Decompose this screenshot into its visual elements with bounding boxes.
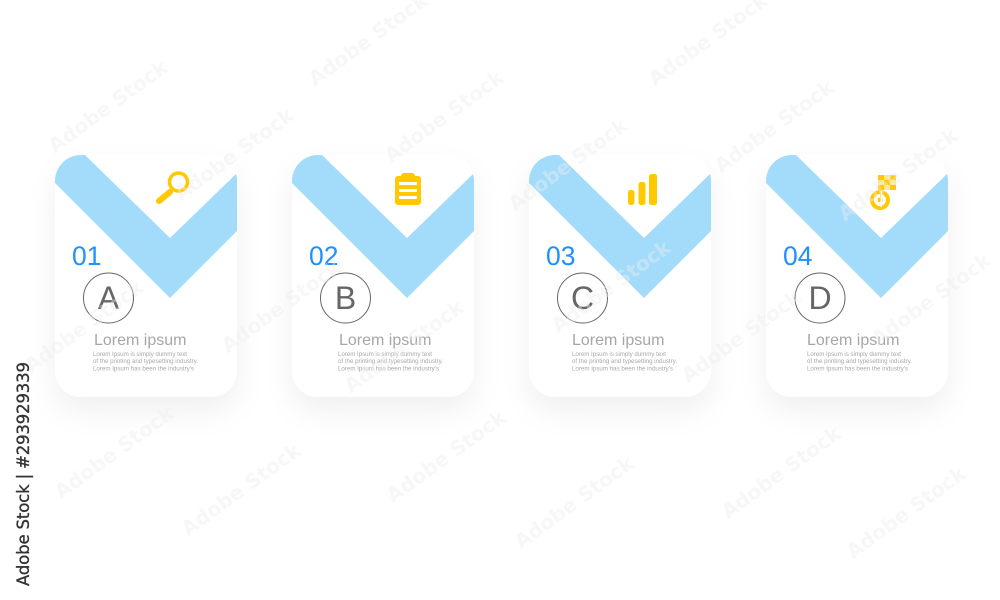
description: Lorem Ipsum is simply dummy text (338, 351, 432, 358)
step number: 02 (309, 241, 338, 271)
description: Lorem Ipsum has been the industry's (93, 366, 194, 372)
icon: bar chart (628, 174, 657, 205)
chevron band (55, 155, 237, 298)
panel: card A (55, 155, 237, 397)
heading: Lorem ipsum (572, 332, 664, 349)
panel: card D (766, 155, 948, 397)
description: Lorem Ipsum is simply dummy text (93, 351, 187, 358)
letter badge (84, 273, 134, 323)
heading: Lorem ipsum (807, 332, 899, 349)
heading: Lorem ipsum (339, 332, 431, 349)
chevron band (766, 155, 948, 298)
watermark text: Adobe Stock (380, 65, 509, 168)
watermark text: Adobe Stock (510, 451, 639, 554)
watermark text: Adobe Stock (170, 103, 299, 206)
description: Lorem Ipsum has been the industry's (572, 366, 673, 372)
step number: 01 (72, 241, 101, 271)
description (572, 351, 677, 372)
watermark text: Adobe Stock (710, 75, 839, 178)
watermark text: Adobe Stock (867, 248, 996, 351)
description: Lorem Ipsum is simply dummy text (807, 351, 901, 358)
watermark text: Adobe Stock (177, 438, 306, 541)
letter badge (320, 273, 370, 323)
panel: card B (292, 155, 474, 397)
chevron band (292, 155, 474, 298)
watermark text: Adobe Stock (677, 285, 806, 388)
description (807, 351, 912, 372)
letter badge: A (98, 280, 120, 316)
description (93, 351, 198, 372)
step number: 04 (783, 241, 812, 271)
watermark text: Adobe Stock (20, 275, 149, 378)
description (338, 351, 443, 372)
watermark text: Adobe Stock (717, 421, 846, 524)
watermark text: Adobe Stock (834, 123, 963, 226)
description: Lorem Ipsum is simply dummy text (572, 351, 666, 358)
watermark text: Adobe Stock (50, 401, 179, 504)
description: of the printing and typesetting industry. (93, 358, 198, 365)
infographic canvas (16, 152, 966, 586)
description: of the printing and typesetting industry. (338, 358, 443, 365)
description: of the printing and typesetting industry. (807, 358, 912, 365)
letter badge: D (808, 280, 832, 316)
watermark text: Adobe Stock (340, 295, 469, 398)
watermark text: Adobe Stock (382, 405, 511, 508)
watermark text: Adobe Stock (547, 235, 676, 338)
description: of the printing and typesetting industry. (572, 358, 677, 365)
step number: 03 (546, 241, 575, 271)
stock id label: Adobe Stock | #293929339 (14, 362, 33, 586)
watermark text: Adobe Stock (217, 255, 346, 358)
watermark text: Adobe Stock (842, 461, 971, 564)
watermark text: Adobe Stock (44, 55, 173, 158)
letter badge (795, 273, 845, 323)
icon: clipboard (395, 173, 421, 205)
panel: card C (529, 155, 711, 397)
watermark text: Adobe Stock (504, 113, 633, 216)
letter badge: B (335, 280, 356, 316)
description: Lorem Ipsum has been the industry's (338, 366, 439, 372)
heading: Lorem ipsum (94, 332, 186, 349)
chevron band (529, 155, 711, 298)
description: Lorem Ipsum has been the industry's (807, 366, 908, 372)
icon: target flag (872, 175, 896, 208)
letter badge: C (571, 280, 594, 316)
letter badge (558, 273, 608, 323)
icon: magnifying glass (159, 173, 188, 201)
